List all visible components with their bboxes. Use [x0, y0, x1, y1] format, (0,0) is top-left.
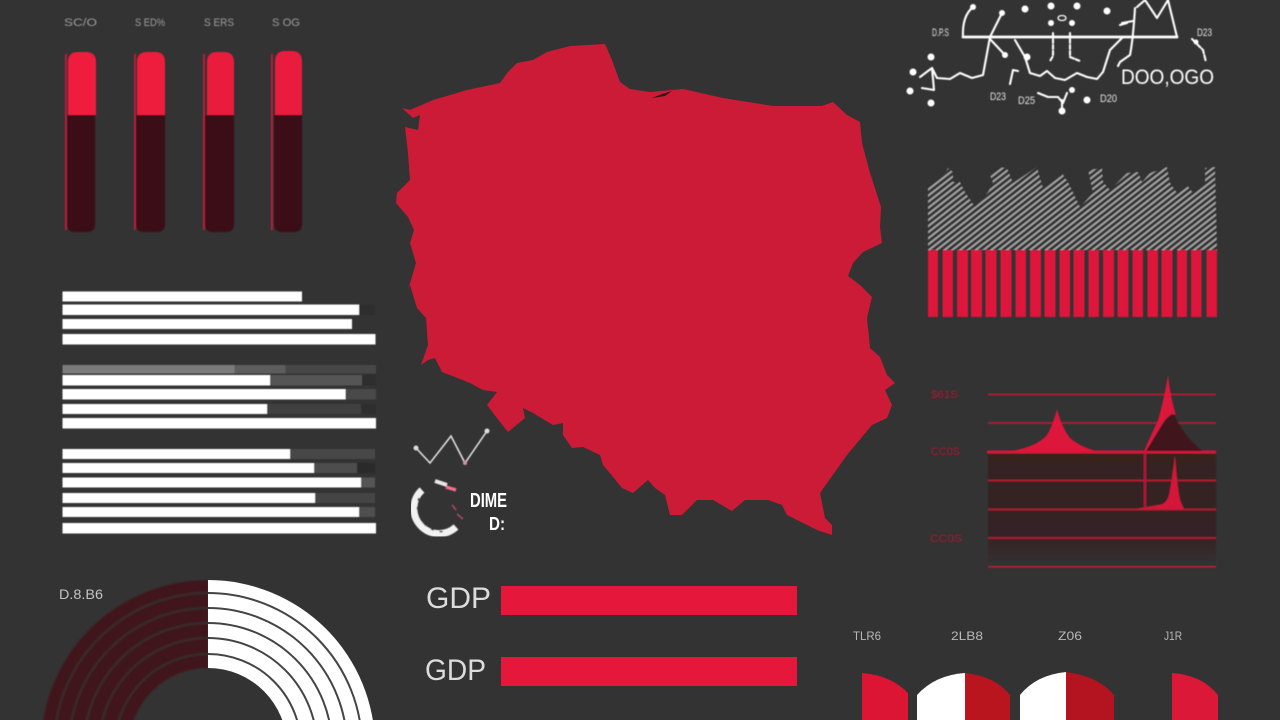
icon: gauge [414, 481, 463, 534]
chart dark peak [1145, 414, 1202, 451]
gauge small value: D: [489, 514, 505, 534]
chart peak 2 [1144, 375, 1176, 451]
chart drop line [1144, 452, 1146, 507]
thermometer 1 [65, 52, 96, 232]
ring chart white half [208, 580, 375, 720]
panel: horizontal bars [62, 292, 376, 534]
ring chart label: D.8.B6 [59, 586, 103, 602]
map of Poland [396, 44, 895, 535]
network lines [920, 0, 1206, 111]
panel: dome bars [853, 629, 1218, 720]
thermometer labels [64, 17, 300, 29]
dome 2 [917, 673, 1010, 720]
panel: GDP bars [425, 582, 797, 687]
dome 3 [1020, 672, 1114, 720]
network dots [906, 2, 1198, 114]
ring chart dark half [41, 580, 208, 720]
GDP row 2: GDP [425, 654, 486, 687]
network value: DOO,OGO [1121, 66, 1214, 89]
dome 1 [862, 673, 908, 720]
panel: network diagram [906, 0, 1214, 114]
chart glow [988, 452, 1216, 568]
thermometer 2 [134, 52, 165, 232]
panel: ring chart [41, 580, 375, 720]
network labels: D23 [990, 91, 1006, 103]
chart labels: CC0S [931, 446, 960, 458]
dome labels: Z06 [1058, 629, 1082, 643]
gauge value text: DIME [470, 490, 507, 512]
bar group 2 [62, 365, 376, 428]
dome labels: 2LB8 [951, 629, 983, 643]
chart labels: $61S [931, 389, 958, 401]
chart grid lines [987, 394, 1216, 567]
chart labels: CC0S [930, 533, 962, 545]
GDP row 2 [425, 654, 797, 687]
GDP row 1: GDP [426, 582, 491, 615]
thermometer 4 [271, 51, 302, 232]
thermometer labels: S ED% [135, 17, 165, 29]
panel: thermometer bars [64, 17, 302, 232]
thermometer labels: S OG [272, 17, 300, 29]
network labels: D.P.S [932, 27, 949, 39]
dome labels [853, 629, 1182, 643]
dome labels: J1R [1164, 629, 1182, 643]
chart labels [930, 389, 962, 545]
network labels [932, 27, 1212, 107]
dome labels: TLR6 [853, 629, 881, 643]
network centre ring [1058, 16, 1066, 20]
thermometer labels: S ERS [204, 17, 234, 29]
panel: red line chart [930, 375, 1216, 568]
network labels: D23 [1197, 27, 1212, 39]
hatched area [928, 167, 1217, 250]
thermometer 3 [203, 52, 234, 232]
network labels: D25 [1018, 95, 1035, 107]
chart peak 1 [1005, 409, 1100, 452]
bar group 3 [62, 449, 376, 534]
dome 4 [1172, 673, 1218, 720]
map coastal lagoon mark [652, 91, 672, 98]
bar group 1 [62, 292, 376, 344]
thermometer labels: SC/O [64, 17, 98, 29]
GDP row 1 [426, 582, 797, 615]
icon: zigzag sparkline [414, 428, 490, 465]
panel: hatched area and red columns [928, 167, 1217, 317]
chart peak 3 [1135, 455, 1184, 509]
red columns [928, 250, 1217, 317]
network labels: D20 [1100, 93, 1117, 105]
